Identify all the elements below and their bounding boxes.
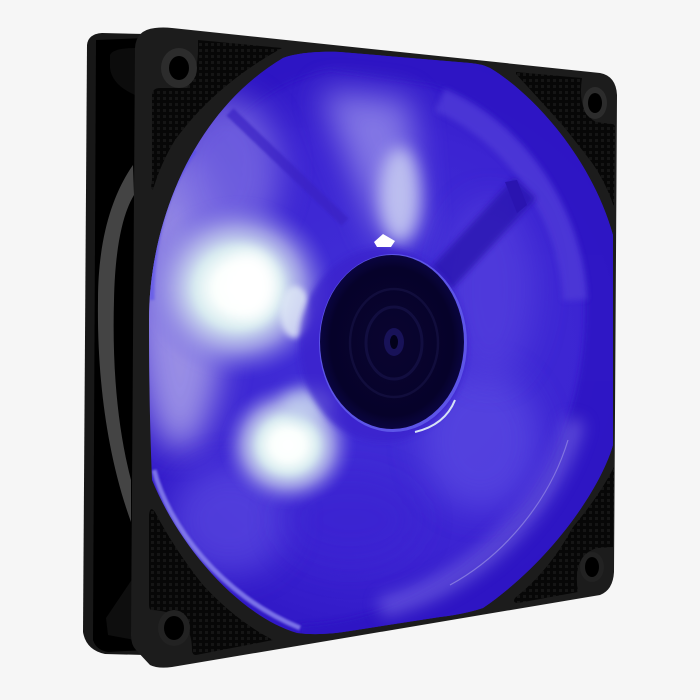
front frame (131, 28, 617, 668)
fan (83, 28, 620, 668)
glowing blue rotor area (135, 40, 620, 650)
back frame (83, 33, 145, 655)
outer diffuser ring (170, 52, 613, 634)
struts (230, 112, 527, 280)
LED chip (374, 234, 395, 247)
pale blade light (320, 90, 420, 240)
corner mesh panels (149, 40, 615, 655)
hub surround (299, 248, 467, 442)
motor hub (319, 254, 467, 432)
blue edge highlight (154, 470, 300, 628)
left haze (135, 150, 225, 450)
screw holes (158, 48, 607, 646)
LED glows (142, 198, 354, 507)
